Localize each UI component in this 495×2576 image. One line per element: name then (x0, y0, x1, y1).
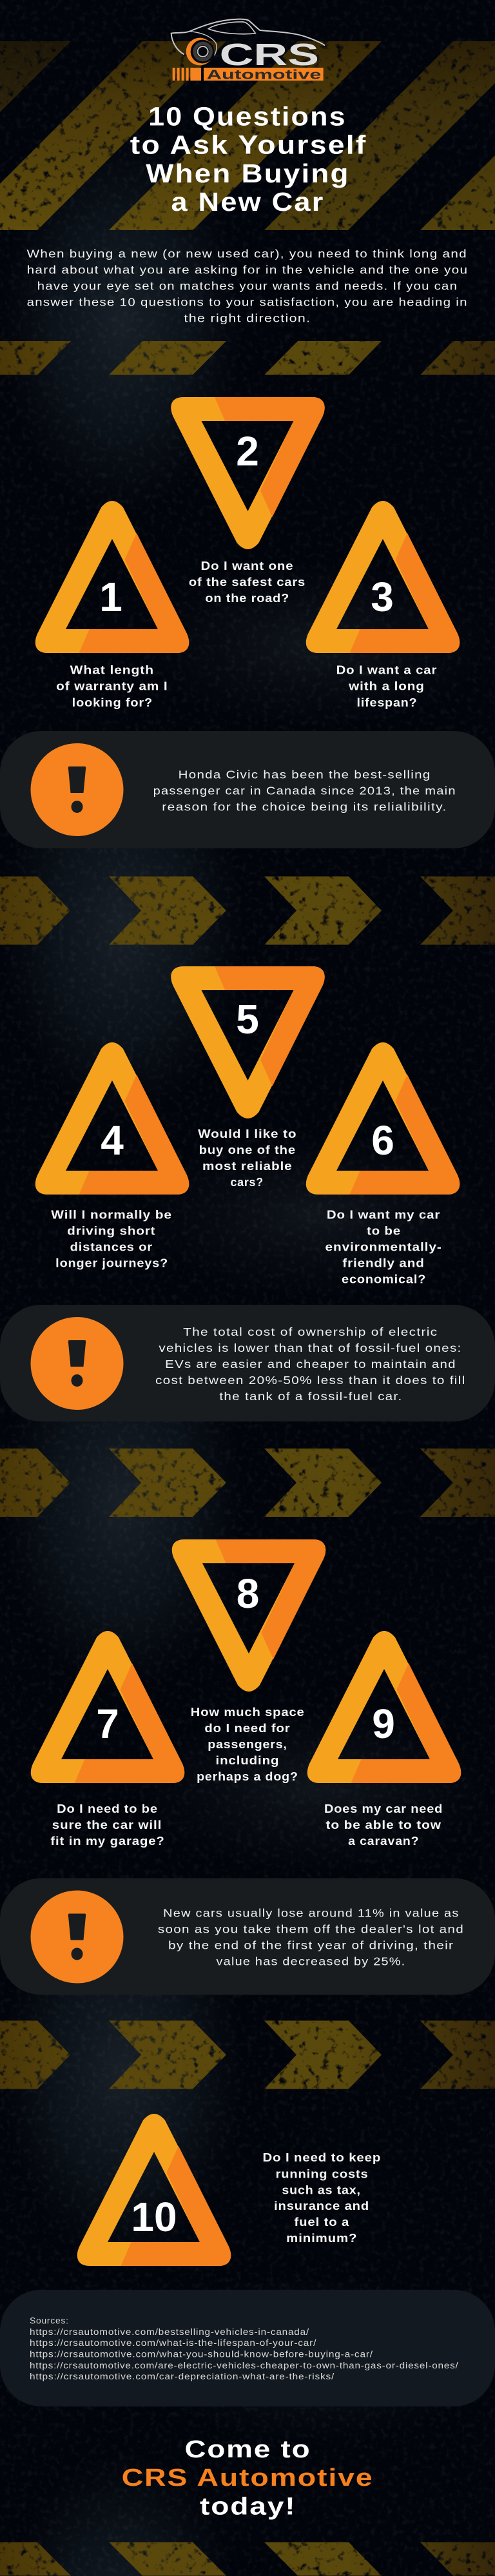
triangle 2 (171, 397, 325, 549)
sources text: Sources: (30, 2316, 69, 2326)
sources text: https://crsautomotive.com/what-is-the-lifespan-of-your-car/ (30, 2338, 316, 2348)
triangle 3: 3 (371, 574, 394, 620)
question 8: including (215, 1753, 279, 1767)
question 6 (325, 1208, 442, 1286)
triangle 9 (307, 1631, 461, 1783)
question 10: minimum? (286, 2231, 357, 2245)
question 5: buy one of the (199, 1143, 296, 1156)
question 7: Do I need to be (57, 1802, 158, 1815)
question 2: on the road? (205, 591, 289, 605)
triangle 4 (35, 1042, 189, 1195)
question 1: of warranty am I (56, 679, 168, 693)
triangle 4: 4 (101, 1117, 124, 1164)
panel: sources (0, 2290, 495, 2406)
callout text: The total cost of ownership of electric (183, 1325, 438, 1338)
question 10 (263, 2151, 381, 2245)
question 6: to be (367, 1224, 401, 1238)
chevron band 3 (0, 2020, 495, 2089)
question 1 (56, 663, 168, 709)
hazard stripes: footer (0, 2542, 495, 2576)
triangle 10: 10 (131, 2194, 177, 2240)
callout text (155, 1325, 465, 1403)
question 10: fuel to a (294, 2215, 349, 2229)
intro text: When buying a new (or new used car), you need to think long and (27, 247, 467, 260)
triangle 7: 7 (96, 1701, 119, 1747)
hazard stripes: below intro (0, 341, 495, 375)
icon: exclamation (31, 1317, 124, 1410)
hazard stripes: header (0, 41, 495, 230)
callout: electric vehicles (0, 1305, 495, 1421)
title: 10 Questions (148, 102, 347, 132)
callout text: by the end of the first year of driving, their (168, 1939, 454, 1952)
question 4: driving short (67, 1224, 155, 1238)
question 8: do I need for (204, 1721, 291, 1735)
question 5: cars? (231, 1175, 264, 1189)
question 9: to be able to tow (326, 1818, 442, 1831)
question 3: with a long (348, 679, 425, 693)
title: When Buying (146, 159, 350, 188)
triangle 9: 9 (372, 1701, 395, 1747)
question 1: What length (70, 663, 154, 677)
question 4 (51, 1208, 172, 1270)
call to action: CRS Automotive (122, 2464, 374, 2492)
question 4: longer journeys? (55, 1256, 168, 1270)
question 2: of the safest cars (189, 575, 306, 589)
call to action: today! (200, 2493, 296, 2521)
triangle 1: 1 (99, 574, 122, 620)
chevron band 2 (0, 1449, 495, 1517)
question 8: perhaps a dog? (197, 1770, 298, 1783)
question 2 (189, 559, 306, 605)
question 6: Do I want my car (327, 1208, 440, 1222)
triangle 5 (171, 966, 325, 1118)
intro text: answer these 10 questions to your satisfaction, you are heading in (27, 295, 468, 308)
callout text: New cars usually lose around 11% in value as (163, 1907, 460, 1920)
question 6: friendly and (342, 1256, 425, 1270)
sources text: https://crsautomotive.com/what-you-should-know-before-buying-a-car/ (30, 2349, 373, 2359)
question 9: a caravan? (348, 1834, 419, 1848)
question 7 (50, 1802, 165, 1848)
logo: CRS Automotive: Automotive (207, 67, 321, 82)
question 4: Will I normally be (51, 1208, 172, 1222)
logo: CRS Automotive (171, 19, 324, 82)
question 6: environmentally- (325, 1240, 442, 1254)
callout text: Honda Civic has been the best-selling (179, 768, 431, 781)
callout text: EVs are easier and cheaper to maintain and (165, 1358, 456, 1371)
triangle 10 (77, 2114, 231, 2266)
triangle 3 (306, 501, 460, 653)
question 9: Does my car need (324, 1802, 443, 1815)
callout text: passenger car in Canada since 2013, the main (153, 784, 456, 797)
chevron band 1 (0, 877, 495, 945)
question 10: Do I need to keep (263, 2151, 381, 2164)
triangle 6: 6 (371, 1117, 394, 1164)
question 7: fit in my garage? (50, 1834, 165, 1848)
question 10: running costs (276, 2167, 369, 2180)
callout text: vehicles is lower than that of fossil-fuel ones: (159, 1342, 462, 1354)
intro text: have your eye set on matches your wants and needs. If you can (37, 279, 458, 292)
title: to Ask Yourself (130, 130, 367, 160)
callout: Honda Civic (0, 731, 495, 848)
triangle 8 (172, 1539, 325, 1692)
triangle 7 (31, 1631, 184, 1783)
call to action (122, 2436, 374, 2521)
callout text (153, 768, 456, 814)
question 1: looking for? (72, 696, 153, 709)
callout text: soon as you take them off the dealer's lot and (158, 1923, 464, 1936)
question 10: insurance and (274, 2199, 369, 2212)
question 8 (191, 1705, 305, 1783)
question 6: economical? (342, 1273, 426, 1286)
callout text: value has decreased by 25%. (217, 1955, 405, 1968)
icon: exclamation (31, 1890, 124, 1983)
sources text: https://crsautomotive.com/bestselling-vehicles-in-canada/ (30, 2327, 309, 2337)
intro text: the right direction. (184, 311, 311, 324)
question 2: Do I want one (201, 559, 294, 572)
callout: depreciation (0, 1878, 495, 1995)
logo: CRS Automotive: CRS (220, 37, 319, 72)
question 3: lifespan? (357, 696, 418, 709)
question 7: sure the car will (52, 1818, 162, 1831)
icon: exclamation (31, 743, 124, 836)
sources text: https://crsautomotive.com/are-electric-vehicles-cheaper-to-own-than-gas-or-diesel-ones/ (30, 2361, 459, 2370)
sources text (30, 2316, 459, 2381)
question 3: Do I want a car (336, 663, 437, 677)
question 4: distances or (70, 1240, 153, 1254)
triangle 5: 5 (236, 996, 259, 1042)
triangle 8: 8 (237, 1570, 259, 1617)
intro text: hard about what you are asking for in the vehicle and the one you (27, 263, 468, 276)
question 5 (198, 1127, 296, 1189)
callout text: cost between 20%-50% less than it does to fill (155, 1374, 465, 1387)
triangle 6 (306, 1042, 460, 1195)
question 8: How much space (191, 1705, 305, 1719)
title: a New Car (171, 187, 325, 217)
question 9 (324, 1802, 443, 1848)
question 5: most reliable (202, 1159, 293, 1173)
question 5: Would I like to (198, 1127, 296, 1140)
callout text: the tank of a fossil-fuel car. (219, 1390, 402, 1403)
question 10: such as tax, (282, 2183, 361, 2196)
triangle 1 (35, 501, 189, 653)
title (130, 102, 367, 217)
triangle 2: 2 (236, 428, 259, 474)
callout text: reason for the choice being its relialibility. (162, 801, 447, 814)
intro text (27, 247, 468, 324)
question 3 (336, 663, 437, 709)
call to action: Come to (184, 2436, 311, 2463)
sources text: https://crsautomotive.com/car-depreciation-what-are-the-risks/ (30, 2372, 335, 2381)
callout text (158, 1907, 464, 1968)
question 8: passengers, (208, 1737, 287, 1751)
